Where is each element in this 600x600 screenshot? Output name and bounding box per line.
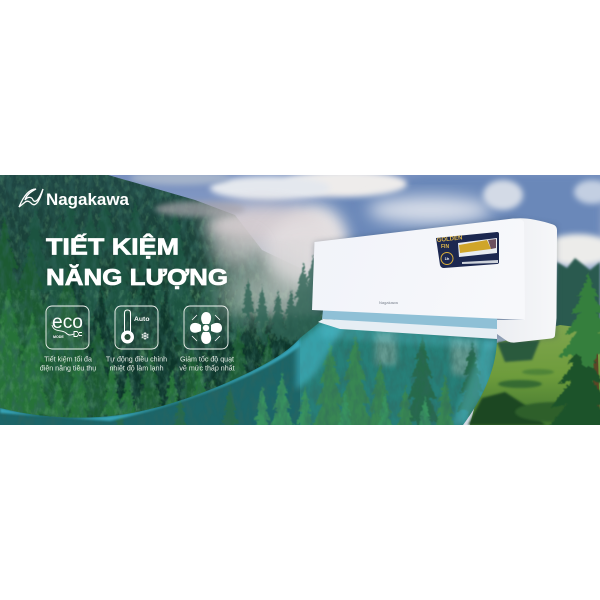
fin text: FIN <box>441 244 449 250</box>
wordmark: Nagakawa <box>46 190 130 209</box>
golden fin badge <box>436 232 499 268</box>
caption: eco: Tiết kiệm tối đa <box>44 354 92 364</box>
logo: Nagakawa <box>19 189 130 209</box>
mode label: MODE <box>53 335 64 339</box>
thermometer <box>121 310 134 344</box>
caption: fan: Giảm tốc độ quạt <box>180 354 234 364</box>
caption: temperature: Tự động điều chỉnh <box>106 354 167 364</box>
AC right side <box>497 218 557 343</box>
snowflake: ❄ <box>140 330 150 343</box>
fan blades <box>190 312 222 344</box>
fan motion arcs <box>192 315 220 341</box>
banner <box>0 175 600 425</box>
AC vent <box>322 310 498 330</box>
misty trees beside the unit <box>242 254 322 346</box>
golden fin heading: GOLDEN <box>437 235 463 244</box>
AC flap <box>318 319 497 339</box>
title <box>46 232 228 290</box>
mist <box>155 201 347 318</box>
title line 2: NĂNG LƯỢNG <box>46 263 228 290</box>
AC brand text: Nagakawa <box>379 300 399 305</box>
gold fin photo <box>458 238 497 257</box>
auto label: Auto <box>134 316 149 323</box>
warranty seal: 1h <box>445 256 450 261</box>
logo mark <box>19 189 43 207</box>
caption: temperature: nhiệt độ làm lạnh <box>109 364 164 372</box>
AC front panel <box>312 218 525 320</box>
icon: eco mode <box>46 306 89 349</box>
far meadow and treeline <box>468 258 600 425</box>
icon: auto temperature <box>115 306 158 349</box>
icon: fan <box>184 306 228 349</box>
caption: eco: điện năng tiêu thụ <box>40 364 96 372</box>
AC shadow <box>312 218 557 343</box>
air conditioner unit <box>312 218 557 343</box>
right foreground tree <box>550 273 600 425</box>
title line 1: TIẾT KIỆM <box>46 232 179 260</box>
forest hillside <box>0 175 335 418</box>
plug <box>52 325 82 336</box>
badge footer strip <box>462 260 498 264</box>
caption: fan: về mức thấp nhất <box>179 364 235 372</box>
eco label: eco <box>52 312 83 333</box>
blue air stream <box>0 322 497 425</box>
background: sky and mountains <box>108 175 600 425</box>
feature captions <box>40 354 235 372</box>
